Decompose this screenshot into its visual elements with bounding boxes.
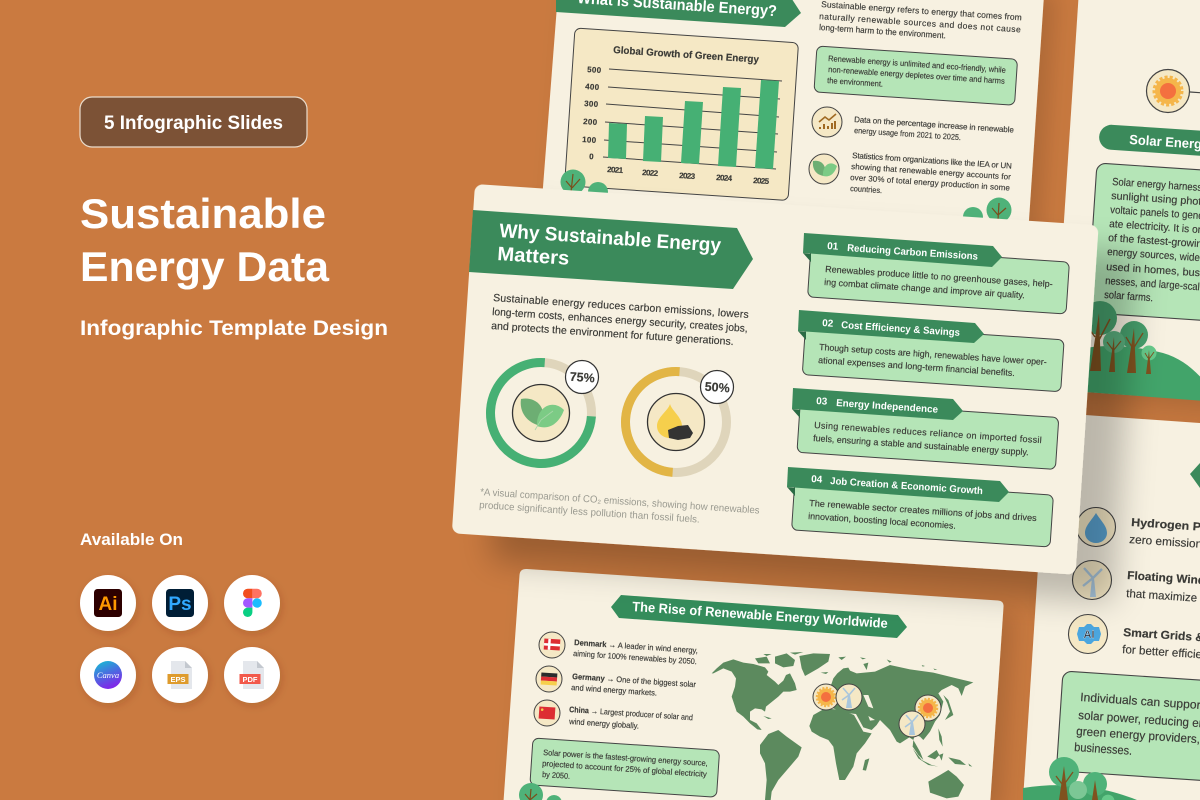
icon: oil drop and coal — [657, 404, 693, 440]
panel: why sustainable energy matters slide — [452, 184, 1099, 575]
icon: sun — [1146, 70, 1200, 112]
card 02: cost efficiency and savings: Though setup costs are high, renewables have lower oper- — [819, 342, 1047, 367]
inland seas — [863, 695, 875, 721]
heading ribbon — [469, 210, 753, 289]
bar chart: global growth of green energy — [565, 28, 799, 200]
heading pill: solar energy — [1098, 124, 1200, 160]
trees: bottom left — [519, 783, 561, 800]
card 03: energy independence: Using renewables reduces reliance on imported fossil — [814, 420, 1042, 445]
text: China — [568, 705, 693, 731]
text: percentage increase: Data on the percentage increase in renewable — [854, 115, 1015, 135]
card 03: energy independence: Energy Independence — [836, 398, 939, 416]
heading arrow — [1190, 463, 1200, 489]
callout: renewable vs non-renewable: Renewable energy is unlimited and eco-friendly, while — [828, 54, 1007, 75]
card 01: reducing carbon emissions: Renewables produce little to no greenhouse gases, help- — [825, 264, 1053, 289]
map marker: sun Europe — [813, 684, 839, 710]
text: hydrogen power — [1129, 517, 1200, 551]
text: statistics: showing that renewable energy accounts for — [851, 162, 1011, 182]
callout: solar growth — [530, 738, 720, 797]
icon: Figma — [224, 575, 280, 631]
year labels: 2021 — [607, 165, 624, 175]
panel: future technologies slide — [1023, 412, 1200, 800]
axis labels: 500 — [587, 65, 602, 75]
card 01: reducing carbon emissions — [803, 233, 1069, 314]
callout: what individuals can do: green energy providers, — [1076, 724, 1200, 746]
card 02: cost efficiency and savings: Cost Efficiency & Savings — [841, 320, 961, 339]
text: Germany: and wind energy markets. — [571, 683, 657, 698]
callout: solar growth: by 2050. — [542, 770, 570, 781]
year labels: 2022 — [642, 168, 659, 178]
callout: what individuals can do: Individuals can support — [1080, 690, 1200, 712]
badge: 50%: 50% — [704, 380, 730, 395]
icon: PDF file: PDF — [242, 675, 258, 684]
card 04: job creation and economic growth: innovation, boosting local economies. — [808, 511, 956, 531]
card 02: cost efficiency and savings: ational expenses and long-term financial benefits. — [818, 355, 1015, 378]
text: statistics: Statistics from organizations like the IEA or UN — [852, 151, 1012, 171]
text: Germany: Germany → One of the biggest solar — [572, 672, 697, 689]
card 04: job creation and economic growth: The renewable sector creates millions of jobs and drives — [809, 498, 1038, 523]
icon: EPS file: EPS — [170, 675, 186, 684]
callout: renewable vs non-renewable: the environment. — [827, 76, 883, 89]
grid lines — [603, 69, 782, 169]
badge: 75%: 75% — [569, 370, 595, 385]
title: Energy Data — [80, 243, 330, 290]
text: Denmark — [573, 638, 698, 666]
callout: solar energy text: solar farms. — [1104, 289, 1153, 304]
trees: chart corner — [560, 170, 608, 202]
card 04: job creation and economic growth: Job Creation & Economic Growth — [830, 476, 983, 497]
trees: bottom right — [963, 198, 1012, 227]
icon: Canva: Canva — [97, 670, 119, 680]
card 03: energy independence: 03 — [816, 396, 828, 408]
icon: Germany flag — [536, 666, 562, 692]
year labels: 2024 — [716, 173, 733, 183]
icon: leaves — [809, 154, 839, 184]
text: percentage increase: energy usage from 2021 to 2025. — [854, 126, 961, 142]
card 03: energy independence: fuels, ensuring a stable and sustainable energy supply. — [813, 433, 1029, 457]
callout: what individuals can do: businesses. — [1074, 740, 1133, 758]
subtitle: Infographic Template Design — [80, 317, 388, 340]
bars — [608, 80, 779, 169]
icon: floating wind turbine — [1072, 560, 1112, 600]
map marker: wind Asia — [899, 711, 925, 737]
text: intro paragraph: long-term costs, enhances energy security, creates jobs, — [492, 306, 748, 335]
text: footnote: produce significantly less pollution than fossil fuels. — [479, 500, 700, 526]
text: intro paragraph — [491, 292, 749, 348]
world map — [712, 652, 973, 800]
icon: Adobe Photoshop — [152, 575, 208, 631]
map marker: sun Asia — [915, 695, 941, 721]
text: intro paragraph: Sustainable energy reduces carbon emissions, lowers — [493, 292, 749, 321]
panel: solar energy slide — [1053, 0, 1200, 407]
text: intro paragraph: and protects the environment for future generations. — [491, 320, 734, 348]
text: statistics: over 30% of total energy production in some — [850, 173, 1011, 193]
axis labels: 300 — [584, 99, 599, 109]
text: smart grids — [1122, 627, 1200, 663]
bar chart: global growth of green energy: Global Growth of Green Energy — [613, 45, 760, 66]
icon: PDF file — [224, 647, 280, 703]
chart: 75% donut — [487, 359, 598, 467]
axis labels — [582, 65, 602, 161]
icon: China flag — [534, 700, 560, 726]
callout: renewable vs non-renewable — [814, 46, 1018, 105]
card 02: cost efficiency and savings — [798, 310, 1064, 392]
illustration: trees and hill — [1023, 757, 1137, 800]
badge: 5 infographic slides — [80, 97, 307, 147]
illustration: hill and trees — [1083, 301, 1200, 401]
year labels — [607, 165, 770, 186]
chart: 50% donut — [622, 368, 734, 476]
panel: rise of renewable energy worldwide slide — [504, 569, 1004, 800]
icon: leaves — [521, 398, 564, 430]
card 01: reducing carbon emissions: Reducing Carbon Emissions — [847, 243, 979, 263]
map marker: wind Europe — [836, 684, 862, 710]
icon: smart grid AI: AI — [1084, 629, 1094, 641]
year labels: 2023 — [679, 171, 696, 181]
text: floating wind: that maximize — [1126, 588, 1197, 605]
card 02: cost efficiency and savings: 02 — [822, 318, 834, 330]
title — [80, 190, 330, 290]
heading ribbon: The Rise of Renewable Energy Worldwide — [632, 599, 889, 631]
text: Germany — [571, 672, 697, 698]
text: footnote: *A visual comparison of CO₂ emissions, showing how renewables — [480, 487, 760, 517]
callout: solar growth: projected to account for 25% of global electricity — [542, 759, 707, 779]
heading ribbon — [556, 0, 801, 27]
axis labels: 0 — [589, 152, 594, 161]
callout: what individuals can do — [1056, 671, 1200, 785]
icon: Adobe Illustrator — [80, 575, 136, 631]
text: definition: naturally renewable sources and does not cause — [819, 11, 1021, 34]
card 01: reducing carbon emissions: 01 — [827, 241, 839, 253]
text: China: China → Largest producer of solar and — [569, 705, 693, 722]
icon: Adobe Illustrator: Ai — [98, 594, 118, 615]
panel: what is sustainable energy slide — [542, 0, 1045, 235]
heading ribbon — [611, 595, 907, 638]
card 04: job creation and economic growth: 04 — [811, 474, 823, 486]
callout: renewable vs non-renewable: non-renewable energy depletes over time and harms — [828, 65, 1005, 86]
axis labels: 400 — [585, 82, 600, 92]
callout: solar growth: Solar power is the fastest-growing energy source, — [543, 748, 708, 768]
icon: Adobe Photoshop: Ps — [168, 594, 192, 615]
text: floating wind — [1126, 570, 1200, 605]
card 04: job creation and economic growth — [787, 467, 1053, 547]
icon: hydrogen drop — [1076, 508, 1116, 546]
text: definition: long-term harm to the environment. — [819, 22, 946, 40]
heading: available on: Available On — [80, 531, 183, 549]
text: Denmark: Denmark → A leader in wind energy, — [574, 638, 698, 655]
text: Denmark: aiming for 100% renewables by 2050. — [573, 649, 697, 666]
badge: 5 infographic slides: 5 Infographic Slides — [104, 113, 283, 134]
text: definition — [819, 0, 1022, 40]
icon: Denmark flag — [539, 632, 565, 658]
card 01: reducing carbon emissions: ing combat climate change and improve air quality. — [824, 277, 1025, 300]
year labels: 2025 — [753, 176, 770, 186]
axis labels: 100 — [582, 135, 597, 145]
text: statistics: countries. — [850, 184, 882, 195]
heading ribbon: Matters — [497, 243, 570, 270]
text: China: wind energy globally. — [568, 717, 639, 731]
icon: smart grid AI — [1068, 614, 1108, 654]
callout: solar energy text — [1087, 163, 1200, 326]
card 03: energy independence — [792, 388, 1059, 469]
text: statistics — [850, 151, 1012, 195]
icon: EPS file — [152, 647, 208, 703]
axis labels: 200 — [583, 117, 598, 127]
heading ribbon: Why Sustainable Energy — [499, 220, 722, 257]
icon: chart — [812, 107, 842, 137]
icon: Canva — [80, 647, 136, 703]
title: Sustainable — [80, 190, 326, 237]
